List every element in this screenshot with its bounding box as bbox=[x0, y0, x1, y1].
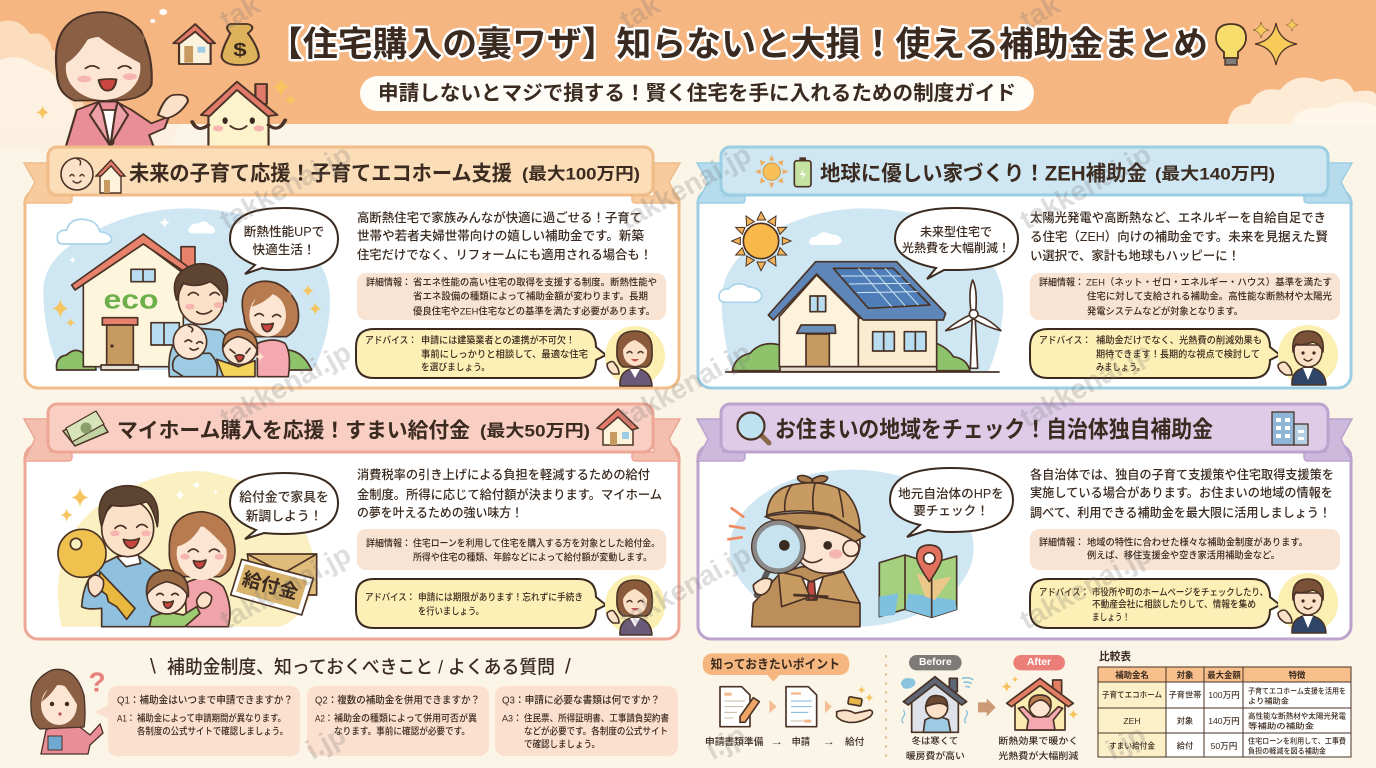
comparison table: 給付 bbox=[1177, 740, 1193, 750]
before label bbox=[909, 655, 962, 670]
FAQ card 2: なります。事前に確認が必要です。 bbox=[334, 726, 470, 736]
comparison table: 高性能な断熱材や太陽光発電 bbox=[1248, 710, 1346, 720]
watermark: takkenai.jp bbox=[614, 538, 756, 636]
advice bubble bbox=[1030, 579, 1280, 628]
key points: application steps bbox=[703, 653, 874, 748]
detail box: 優良住宅やZEH住宅などの基準を満たす必要があります。 bbox=[413, 306, 655, 318]
text block: intro: の夢を叶えるための強い味方！ bbox=[357, 505, 523, 520]
FAQ character: woman with question mark bbox=[31, 666, 106, 754]
header band bbox=[0, 0, 1376, 150]
advice bubble: アドバイス： bbox=[365, 336, 417, 346]
text block: intro bbox=[357, 210, 652, 262]
ribbon: sumai benefit heading: (最大50万円) bbox=[480, 422, 590, 440]
FAQ heading: 補助金制度、知っておくべきこと / よくある質問 bbox=[167, 656, 555, 678]
mascot house character bbox=[192, 77, 297, 147]
FAQ card 3: で確認しましょう。 bbox=[524, 738, 600, 750]
comparison table: 最大金額 bbox=[1207, 670, 1241, 680]
icon: warm house bbox=[1001, 676, 1078, 730]
subtitle pill bbox=[360, 76, 1034, 111]
comparison table: 等補助の補助金 bbox=[1248, 720, 1315, 730]
text block: intro: 太陽光発電や高断熱など、エネルギーを自給自足でき bbox=[1030, 210, 1326, 225]
watermark: takkenai.jp bbox=[1014, 138, 1156, 236]
detail box: 例えば、移住支援金や空き家活用補助金など。 bbox=[1087, 550, 1280, 562]
icon: money bag in title bbox=[222, 24, 259, 65]
watermark: takkenai.jp bbox=[1014, 538, 1156, 636]
icon: sparkles bbox=[1253, 19, 1298, 65]
watermark: takkenai.jp bbox=[1014, 336, 1156, 434]
ribbon: ZEH heading: (最大140万円) bbox=[1155, 164, 1275, 184]
before caption: 冬は寒くて bbox=[912, 735, 958, 746]
watermark: takkenai.jp bbox=[614, 336, 756, 434]
comparison table: 住宅ローンを利用して、工事費 bbox=[1248, 736, 1346, 746]
comparison table: 140万円 bbox=[1208, 716, 1240, 726]
watermark: takkenai.jp bbox=[214, 336, 356, 434]
comparison table: 対象 bbox=[1177, 670, 1194, 680]
text block: intro: 高断熱住宅で家族みんなが快適に過ごせる！子育て bbox=[357, 210, 642, 225]
ribbon: local government heading: お住まいの地域をチェック！自治体独自補助金 bbox=[775, 416, 1213, 442]
panel: child eco home bbox=[24, 147, 680, 388]
comparison table: 100万円 bbox=[1208, 690, 1240, 700]
ribbon: child eco home heading: (最大100万円) bbox=[522, 164, 640, 184]
icon: light bulb bbox=[1216, 24, 1246, 65]
advice bubble: アドバイス： bbox=[1039, 588, 1089, 598]
speech bubble: check website: 地元自治体のHPを bbox=[898, 486, 1004, 501]
detail box: 省エネ性能の高い住宅の取得を支援する制度。断熱性能や bbox=[413, 276, 657, 288]
FAQ card 1: Q1：補助金はいつまで申請できますか？ bbox=[117, 694, 293, 706]
advice bubble: みましょう。 bbox=[1096, 362, 1145, 374]
text block: intro: 消費税率の引き上げによる負担を軽減するための給付 bbox=[357, 467, 650, 482]
title: 【住宅購入の裏ワザ】知らないと大損！使える補助金まとめ bbox=[268, 26, 1208, 64]
panel: ZEH bbox=[697, 147, 1352, 388]
FAQ heading: / bbox=[565, 656, 571, 678]
advice bubble: 期待できます！長期的な視点で検討して bbox=[1096, 348, 1260, 360]
steps caption bbox=[705, 736, 865, 748]
advice bubble: 事前にしっかりと相談して、最適な住宅 bbox=[421, 348, 588, 360]
speech bubble: check website: 要チェック！ bbox=[913, 504, 989, 518]
detail box: 所得や住宅の種類、年齢などによって給付額が変動します。 bbox=[413, 552, 652, 564]
FAQ card 3 bbox=[495, 686, 678, 756]
speech bubble: insulation: 快適生活！ bbox=[253, 242, 315, 257]
advice bubble: アドバイス： bbox=[365, 592, 415, 604]
ribbon: child eco home heading: 未来の子育て応援！子育てエコホーム支援 bbox=[129, 162, 512, 186]
detail box bbox=[357, 273, 666, 320]
detail box bbox=[1030, 273, 1340, 320]
icon: cold house bbox=[901, 677, 973, 732]
watermark bbox=[214, 0, 1156, 766]
FAQ card 1: 補助金によって申請期間が異なります。 bbox=[137, 712, 286, 724]
FAQ heading: \ bbox=[150, 656, 156, 678]
FAQ card 3: 住民票、所得証明書、工事請負契約書 bbox=[524, 712, 669, 724]
advice bubble: アドバイス： bbox=[1039, 336, 1091, 346]
watermark: i.jp bbox=[300, 719, 351, 766]
FAQ card 1: A1： bbox=[117, 712, 135, 724]
icon: office building bbox=[1272, 412, 1308, 445]
steps caption: 申請 bbox=[792, 736, 810, 748]
speech bubble: check website bbox=[890, 468, 1013, 537]
points pill label bbox=[703, 653, 849, 682]
detail box: ZEH（ネット・ゼロ・エネルギー・ハウス）基準を満たす bbox=[1086, 276, 1332, 288]
advice bubble: 申請には建築業者との連携が不可欠！ bbox=[421, 334, 575, 346]
FAQ card 2: Q2：複数の補助金を併用できますか？ bbox=[315, 694, 480, 706]
FAQ card 3: などが必要です。各制度の公式サイト bbox=[524, 726, 668, 736]
ribbon: local government heading bbox=[697, 404, 1352, 461]
comparison table: すまい給付金 bbox=[1109, 740, 1155, 750]
speech bubble: furniture bbox=[230, 473, 338, 539]
text block: intro: 調べて、利用できる補助金を最大限に活用しましょう！ bbox=[1030, 505, 1331, 520]
detail box: 省エネ設備の種類によって補助金額が変わります。長期 bbox=[413, 290, 648, 302]
comparison table bbox=[1098, 667, 1351, 757]
steps caption: 給付 bbox=[845, 736, 865, 748]
icon: baby and house bbox=[61, 158, 125, 193]
watermark: i.jp bbox=[1100, 719, 1151, 766]
comparison table: 子育てエコホーム bbox=[1102, 690, 1162, 700]
speech bubble: utility savings: 未来型住宅で bbox=[920, 224, 992, 239]
icon: sun and battery bbox=[755, 155, 811, 188]
avatar: advisor man bbox=[1278, 573, 1338, 633]
detail box bbox=[1030, 529, 1340, 570]
FAQ character: woman with question mark: ? bbox=[88, 666, 106, 698]
illustration: solar house bbox=[719, 208, 1003, 372]
icon: hand receiving money bbox=[837, 686, 874, 722]
after caption: 光熱費が大幅削減 bbox=[998, 750, 1079, 761]
arrow bbox=[769, 700, 777, 713]
advice bubble: 市役所や町のホームページをチェックしたり、 bbox=[1092, 586, 1268, 598]
speech bubble: insulation bbox=[230, 208, 338, 274]
comparison table: 子育てエコホーム支援を活用を bbox=[1248, 686, 1346, 696]
subtitle pill: 申請しないとマジで損する！賢く住宅を手に入れるための制度ガイド bbox=[378, 82, 1016, 105]
avatar: advisor woman bbox=[605, 575, 665, 635]
FAQ card 1: 各制度の公式サイトで確認しましょう。 bbox=[137, 726, 288, 736]
FAQ card 2: A2： bbox=[315, 712, 333, 724]
steps caption: → bbox=[770, 737, 783, 748]
advice bubble: を選びましょう。 bbox=[421, 362, 490, 374]
before caption bbox=[906, 735, 965, 761]
comparison table title: 比較表 bbox=[1099, 649, 1131, 663]
icon: magnifier bbox=[738, 412, 769, 443]
after caption: 断熱効果で暖かく bbox=[998, 735, 1078, 746]
FAQ card 1 bbox=[95, 686, 300, 756]
speech bubble: furniture: 新調しよう！ bbox=[246, 508, 322, 524]
icon: money bag in title: $ bbox=[233, 40, 247, 60]
advice bubble: を行いましょう。 bbox=[418, 606, 484, 618]
text block: intro: 住宅だけでなく、リフォームにも適用される場合も！ bbox=[357, 247, 652, 262]
illustration: eco house and family bbox=[43, 208, 330, 377]
before caption: 暖房費が高い bbox=[906, 750, 965, 761]
text block: intro: 世帯や若者夫婦世帯向けの嬉しい補助金です。新築 bbox=[357, 228, 644, 243]
advice bubble: 申請には期限があります！忘れずに手続き bbox=[418, 592, 583, 604]
speech bubble: utility savings bbox=[895, 208, 1018, 279]
text block: intro: 実施している場合があります。お住まいの地域の情報を bbox=[1030, 485, 1333, 500]
after label: After bbox=[1027, 657, 1051, 668]
watermark: takkenai.jp bbox=[214, 538, 356, 636]
points pill label: 知っておきたいポイント bbox=[711, 656, 840, 671]
icon: document and pencil bbox=[720, 687, 759, 727]
detail box bbox=[357, 529, 666, 570]
advice bubble bbox=[356, 579, 606, 628]
comparison table: 特徴 bbox=[1289, 670, 1306, 680]
FAQ card 2: 補助金の種類によって併用可否が異 bbox=[334, 712, 477, 724]
detail box: 詳細情報： bbox=[1039, 536, 1084, 548]
steps caption: 申請書類準備 bbox=[705, 736, 764, 748]
avatar: advisor man bbox=[1278, 325, 1338, 385]
text block: intro: 金制度。所得に応じて給付額が決まります。マイホーム bbox=[357, 487, 662, 502]
steps caption: → bbox=[823, 737, 835, 748]
ribbon: sumai benefit heading: マイホーム購入を応援！すまい給付金 bbox=[117, 420, 470, 442]
advice bubble bbox=[356, 329, 606, 378]
after label bbox=[1013, 655, 1065, 670]
FAQ card 3: A3： bbox=[502, 712, 522, 724]
illustration: detective and map bbox=[728, 470, 974, 627]
speech bubble: utility savings: 光熱費を大幅削減！ bbox=[902, 240, 1010, 255]
comparison table: 負担の軽減を図る補助金 bbox=[1248, 746, 1326, 756]
illustration: family with key bbox=[58, 471, 317, 627]
comparison table: 子育世帯 bbox=[1169, 690, 1201, 700]
before label: Before bbox=[919, 657, 952, 668]
ribbon: ZEH heading bbox=[697, 147, 1352, 203]
comparison table: ZEH bbox=[1123, 716, 1141, 726]
detail box: 住宅ローンを利用して住宅を購入する方を対象とした給付金。 bbox=[413, 538, 660, 550]
text block: intro: 各自治体では、独自の子育て支援策や住宅取得支援策を bbox=[1030, 467, 1334, 482]
watermark: takkenai.jp bbox=[214, 138, 356, 236]
watermark: i.jp bbox=[700, 719, 751, 766]
comparison table: 50万円 bbox=[1211, 741, 1237, 751]
comparison table: より補助金 bbox=[1248, 696, 1289, 706]
detail box: 詳細情報： bbox=[366, 538, 411, 550]
before after comparison bbox=[901, 655, 1079, 761]
advice bubble: 不動産会社に相談したりして、情報を集め bbox=[1092, 598, 1256, 610]
comparison table: 対象 bbox=[1177, 716, 1193, 726]
arrow bbox=[825, 700, 832, 713]
ribbon: ZEH heading: 地球に優しい家づくり！ZEH補助金 bbox=[820, 162, 1147, 186]
FAQ card 3: Q3：申請に必要な書類は何ですか？ bbox=[502, 694, 660, 706]
detail box: 地域の特性に合わせた様々な補助金制度があります。 bbox=[1087, 536, 1308, 548]
icon: house in title bbox=[173, 24, 215, 64]
advice bubble bbox=[1030, 329, 1280, 378]
advice bubble: 補助金だけでなく、光熱費の削減効果も bbox=[1096, 334, 1262, 346]
illustration: eco house and family: eco bbox=[103, 284, 158, 314]
detail box: 詳細情報： bbox=[366, 276, 411, 288]
icon: small house bbox=[597, 409, 638, 445]
detail box: 詳細情報： bbox=[1039, 276, 1084, 288]
text block: intro: い選択で、家計も地球もハッピーに！ bbox=[1030, 248, 1240, 263]
comparison table: 補助金名 bbox=[1115, 670, 1149, 680]
text block: intro bbox=[357, 467, 662, 520]
speech bubble: insulation: 断熱性能UPで bbox=[244, 224, 324, 239]
text block: intro: る住宅（ZEH）向けの補助金です。未来を見据えた賢 bbox=[1030, 229, 1328, 244]
after caption bbox=[998, 735, 1079, 761]
mascot woman presenter bbox=[36, 9, 188, 147]
FAQ card 2 bbox=[307, 686, 489, 756]
illustration: family with key: 給付金 bbox=[240, 568, 300, 604]
speech bubble: furniture: 給付金で家具を bbox=[239, 490, 329, 504]
detail box: 発電システムなどが対象となります。 bbox=[1087, 306, 1243, 318]
avatar: advisor woman bbox=[605, 326, 665, 386]
panel: local government bbox=[697, 404, 1352, 639]
detail box: 住宅に対して支給される補助金。高性能な断熱材や太陽光 bbox=[1087, 290, 1332, 302]
ribbon: child eco home heading bbox=[24, 147, 680, 203]
icon: application form bbox=[786, 687, 817, 727]
icon: banknotes bbox=[63, 411, 108, 446]
panel: sumai benefit bbox=[24, 404, 680, 639]
watermark: takkenai.jp bbox=[614, 138, 756, 236]
text block: intro bbox=[1030, 467, 1334, 520]
text block: intro bbox=[1030, 210, 1328, 263]
advice bubble: ましょう！ bbox=[1092, 612, 1130, 624]
ribbon: sumai benefit heading bbox=[24, 404, 680, 461]
dotted divider bbox=[885, 655, 887, 760]
arrow: before to after bbox=[978, 698, 996, 716]
